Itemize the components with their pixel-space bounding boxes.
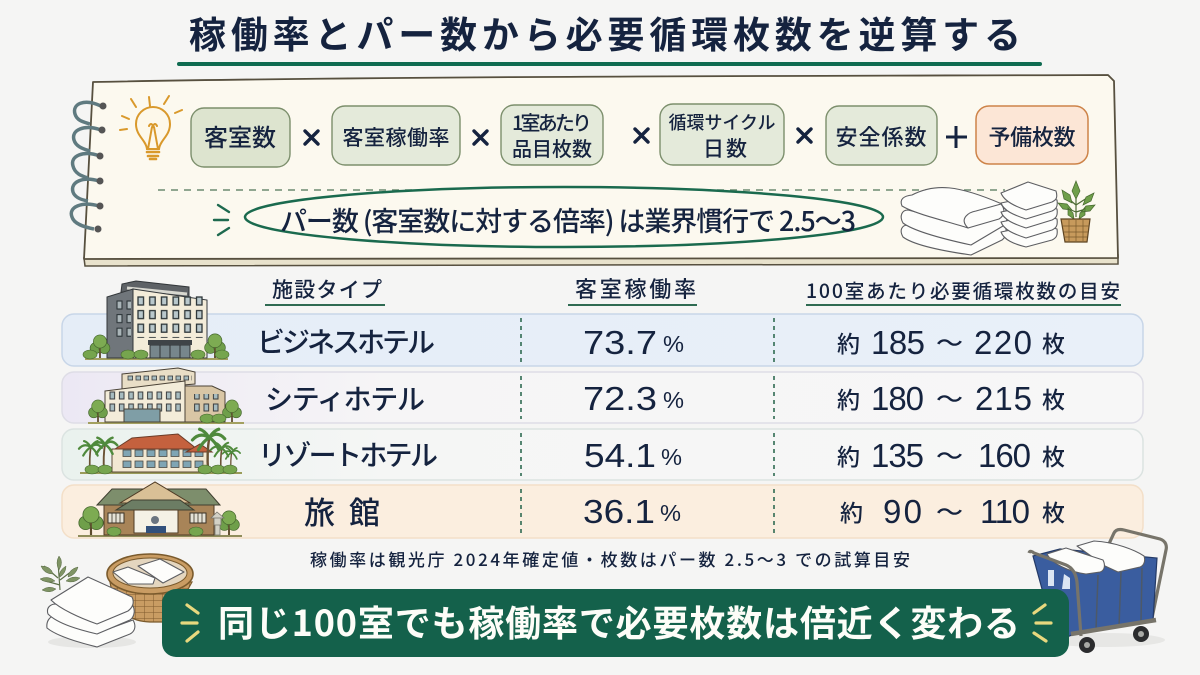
- row: 旅館: 旅館: [304, 488, 380, 533]
- row: リゾートホテル: 枚: [1042, 438, 1065, 472]
- icon: folded towels: [47, 577, 136, 648]
- icon: business hotel: [83, 281, 229, 359]
- row: シティホテル: 72.3: [583, 380, 657, 417]
- row: シティホテル: 枚: [1042, 381, 1065, 415]
- banner: conclusion: [162, 589, 1069, 657]
- row: ビジネスホテル: %: [663, 331, 684, 357]
- callout: par count: [245, 187, 883, 247]
- row: リゾートホテル: 160: [978, 437, 1031, 474]
- formula box: 循環サイクル日数: 循環サイクル: [668, 109, 776, 135]
- row: 旅館: 〜: [936, 493, 963, 527]
- formula box: 1室あたり品目枚数: [501, 105, 603, 165]
- formula box: 安全係数: 安全係数: [836, 120, 926, 152]
- panel: formula notebook: [71, 75, 1118, 266]
- icon: city hotel: [88, 368, 244, 423]
- header: 施設タイプ: 施設タイプ: [272, 274, 382, 304]
- formula box: 1室あたり品目枚数: 1室あたり: [512, 107, 592, 136]
- row: シティホテル: [62, 372, 1143, 423]
- operator: times: [635, 129, 648, 142]
- row: シティホテル: 180: [871, 380, 924, 417]
- row: リゾートホテル: 135: [871, 437, 924, 474]
- row: ビジネスホテル: 185: [871, 324, 925, 361]
- operator: plus: [946, 126, 967, 148]
- icon: sparkle lines: [214, 205, 229, 235]
- title underline: [177, 62, 1042, 66]
- note: 稼働率は観光庁 2024年確定値・枚数はパー数 2.5〜3 での試算目安: [310, 546, 910, 571]
- row: ビジネスホテル: 枚: [1042, 325, 1065, 359]
- icon: potted plant: [1058, 181, 1095, 242]
- row: シティホテル: 〜: [936, 380, 963, 414]
- formula box: 予備枚数: [976, 106, 1088, 164]
- formula box: 循環サイクル日数: [660, 104, 784, 165]
- row: 旅館: 枚: [1042, 494, 1065, 528]
- row: リゾートホテル: リゾートホテル: [258, 434, 438, 474]
- row: ビジネスホテル: 約: [837, 325, 860, 359]
- row: シティホテル: %: [663, 387, 684, 413]
- icon: spiral binding: [71, 102, 106, 232]
- row: リゾートホテル: 約: [837, 438, 860, 472]
- icon: laundry basket: [107, 554, 193, 622]
- formula box: 循環サイクル日数: 日数: [703, 133, 747, 163]
- formula box: 客室稼働率: [332, 106, 460, 165]
- formula box: 客室稼働率: 客室稼働率: [342, 122, 450, 152]
- formula box: 安全係数: [826, 106, 937, 165]
- row: 旅館: 約: [840, 494, 863, 528]
- title: 稼働率とパー数から必要循環枚数を逆算する: [189, 5, 1021, 59]
- formula box: 予備枚数: 予備枚数: [988, 120, 1076, 152]
- icon: linen cart: [1029, 529, 1166, 653]
- operator: times: [474, 131, 487, 144]
- banner text: 同じ100室でも稼働率で必要枚数は倍近く変わる: [218, 595, 1020, 647]
- formula box: 1室あたり品目枚数: 品目枚数: [512, 133, 592, 162]
- row: 旅館: %: [660, 500, 681, 526]
- row: ビジネスホテル: 220: [974, 324, 1032, 361]
- row: リゾートホテル: 〜: [936, 437, 963, 471]
- icon: light bulb: [120, 96, 182, 159]
- row: シティホテル: 215: [975, 380, 1032, 417]
- callout: par count: パー数 (客室数に対する倍率) は業界慣行で 2.5〜3: [280, 200, 856, 239]
- icon: leaves: [40, 556, 80, 592]
- row: シティホテル: シティホテル: [265, 378, 425, 418]
- notebook page: [84, 75, 1118, 266]
- row: ビジネスホテル: 73.7: [583, 324, 657, 361]
- icon: folded towels large: [901, 188, 1007, 255]
- banner sparkle right: [1034, 605, 1051, 641]
- formula box: 客室数: 客室数: [204, 118, 276, 153]
- row: リゾートホテル: 54.1: [584, 437, 656, 474]
- row: 旅館: 36.1: [583, 493, 655, 530]
- row: リゾートホテル: [62, 429, 1143, 480]
- icon: ryokan: [78, 482, 242, 536]
- row: ビジネスホテル: [62, 314, 1143, 366]
- icon: resort hotel: [79, 429, 242, 474]
- row: リゾートホテル: %: [661, 444, 682, 470]
- row: ビジネスホテル: ビジネスホテル: [257, 321, 435, 361]
- operator: times: [798, 129, 811, 142]
- row: 旅館: 90: [883, 493, 922, 530]
- row: 旅館: 110: [980, 493, 1030, 530]
- row: ビジネスホテル: 〜: [936, 324, 963, 358]
- header: 100室あたり必要循環枚数の目安: 100室あたり必要循環枚数の目安: [806, 275, 1120, 304]
- formula box: 客室数: [191, 108, 290, 167]
- banner sparkle left: [182, 605, 198, 641]
- header: 客室稼働率: 客室稼働率: [575, 272, 696, 304]
- operator: times: [305, 131, 318, 144]
- row: 旅館: [62, 485, 1143, 538]
- icon: small towel stack: [1001, 182, 1057, 247]
- row: シティホテル: 約: [837, 381, 860, 415]
